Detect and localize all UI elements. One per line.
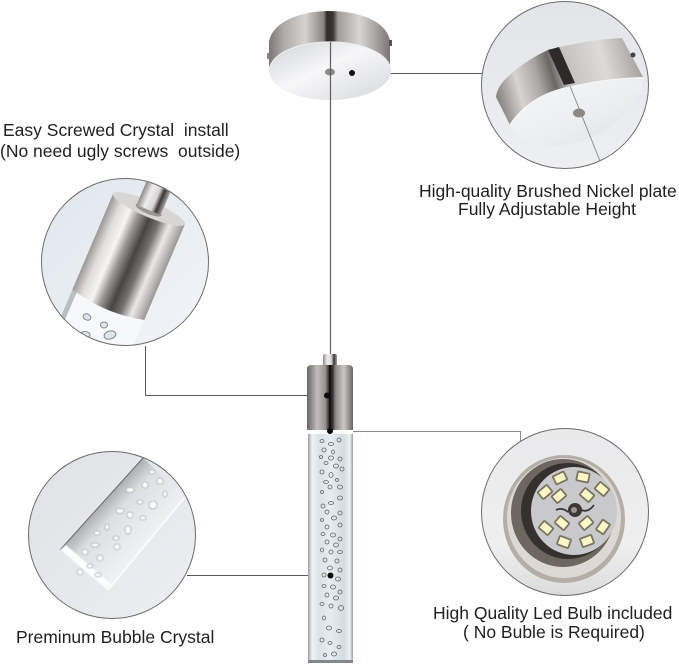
magnifier: bubble crystal: [28, 451, 196, 619]
crystal bubbles: [77, 470, 167, 577]
caption: LED bulb: [433, 603, 672, 642]
caption: bubble crystal: Preminum Bubble Crystal: [16, 627, 214, 647]
dark interior: [511, 459, 615, 567]
caption: brushed nickel plate: Fully Adjustable Height: [458, 199, 636, 219]
LED board: [531, 467, 617, 555]
caption: LED bulb: ( No Buble is Required): [463, 622, 645, 642]
caption: screwed crystal install: (No need ugly screws outside): [0, 141, 240, 161]
caption: brushed nickel plate: High-quality Brushed Nickel plate: [419, 181, 677, 201]
pendant cap: [323, 354, 337, 366]
crystal bubbles: [320, 438, 344, 656]
crystal rod: [308, 431, 353, 663]
pendant light: [307, 354, 353, 663]
caption: screwed crystal install: [0, 120, 240, 161]
center screw: [568, 503, 582, 517]
caption: screwed crystal install: Easy Screwed Crystal install: [3, 120, 229, 140]
crystal section: [66, 292, 144, 345]
metal sleeve: [71, 194, 185, 325]
leader lines: [146, 74, 520, 576]
caption: LED bulb: High Quality Led Bulb included: [433, 603, 672, 623]
magnifier: LED bulb: [481, 428, 649, 596]
crystal rod: [60, 458, 156, 583]
hanging cord: [330, 42, 332, 356]
stem cap: [140, 182, 170, 206]
magnifier: screwed crystal install: [41, 178, 209, 346]
metal ring: [503, 455, 625, 583]
callout dots: [324, 392, 334, 578]
LED chips: [538, 471, 610, 548]
caption: brushed nickel plate: [419, 181, 677, 219]
ceiling canopy: [267, 11, 392, 100]
pendant metal cylinder: [307, 365, 353, 430]
canopy underside: [533, 84, 590, 104]
magnifier: brushed nickel plate: [481, 1, 649, 169]
dark reflection band: [548, 47, 575, 85]
crystal bubbles: [80, 313, 117, 340]
canopy wall: [496, 38, 643, 125]
